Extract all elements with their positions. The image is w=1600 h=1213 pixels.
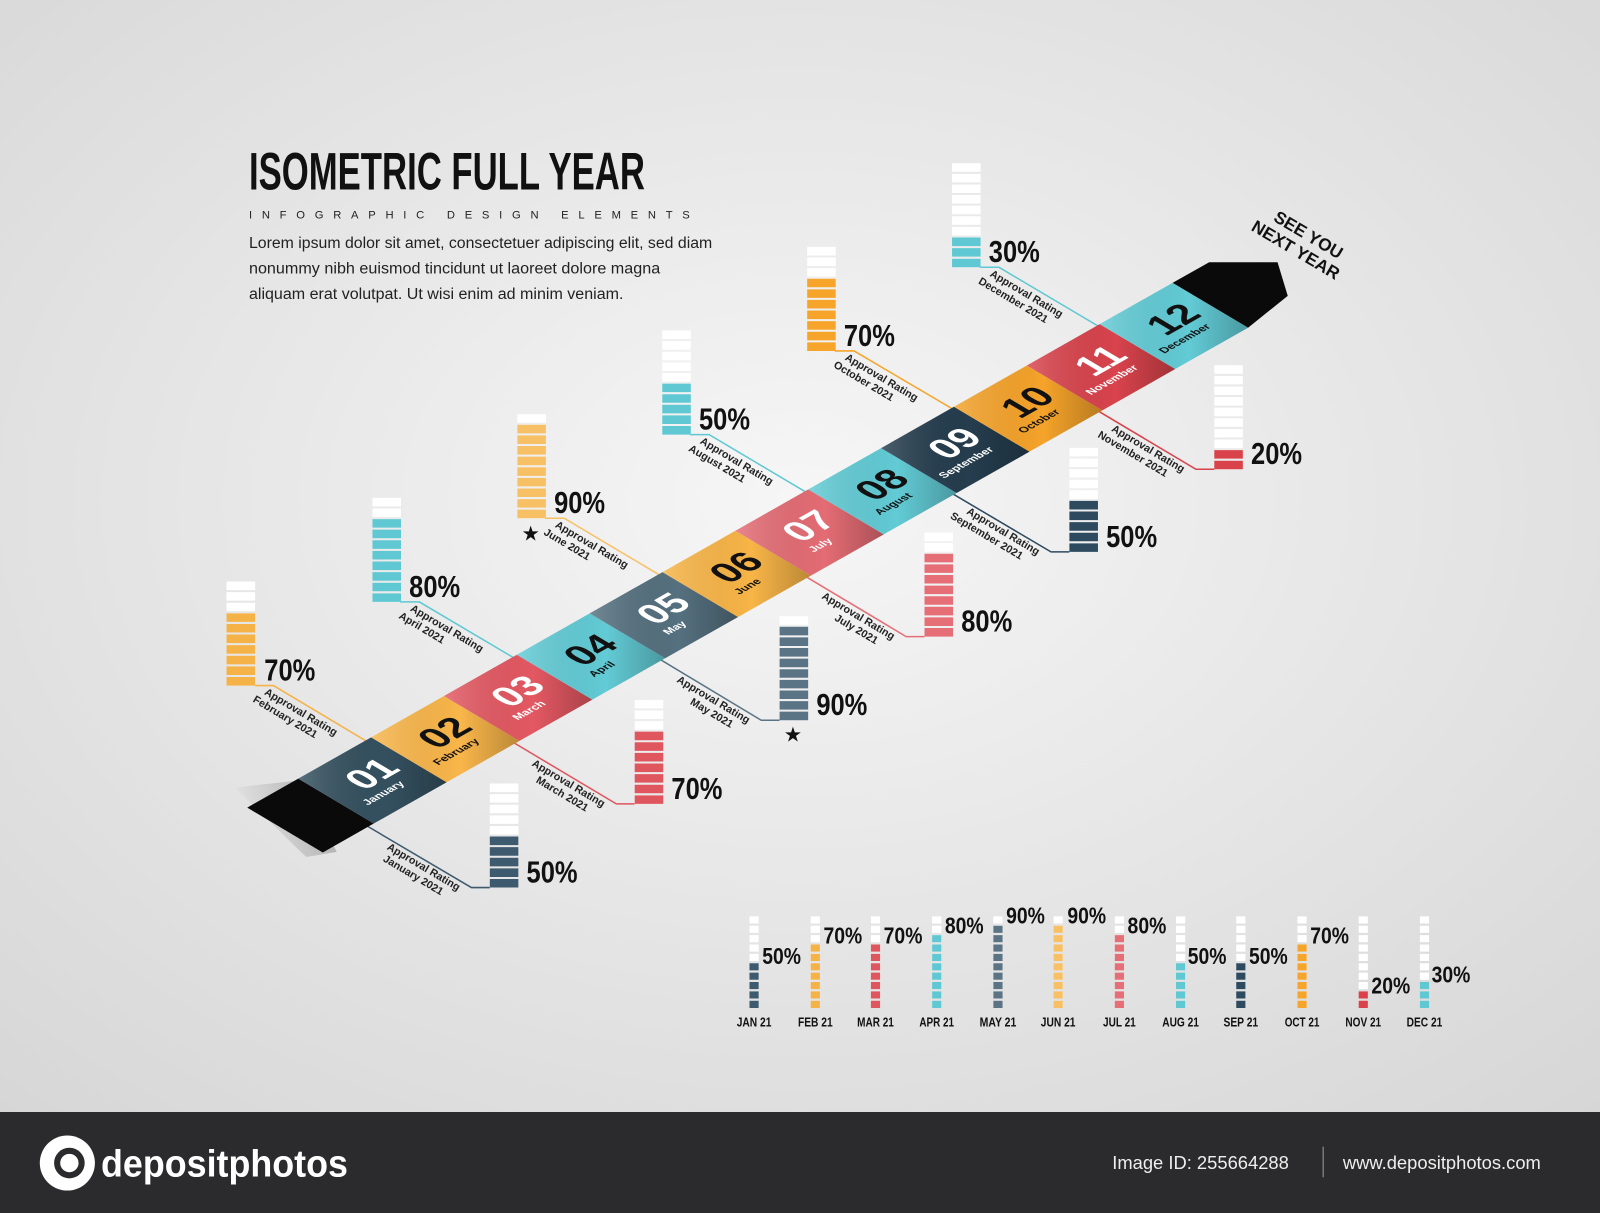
segment 10 <box>954 365 1102 452</box>
approval rating labels: Approval Rating <box>385 841 462 894</box>
summary bar chart: SEP 21 <box>1223 1014 1258 1029</box>
approval rating labels: Approval Rating <box>553 519 630 571</box>
segment 03 <box>444 655 592 741</box>
title: ISOMETRIC FULL YEAR <box>249 143 645 202</box>
footer bar <box>0 1112 1600 1213</box>
approval rating labels: Approval Rating <box>262 686 339 739</box>
summary bar chart: OCT 21 <box>1285 1014 1319 1029</box>
big percentages: 70% <box>671 772 722 806</box>
summary bar chart: NOV 21 <box>1345 1014 1381 1029</box>
segment 10: October <box>1016 408 1064 435</box>
approval rating labels: June 2021 <box>541 526 592 563</box>
approval rating labels: October 2021 <box>831 359 896 404</box>
footer bar: depositphotos <box>101 1142 348 1184</box>
segment 03: 03 <box>481 670 555 713</box>
subtitle: INFOGRAPHIC DESIGN ELEMENTS <box>249 209 690 221</box>
approval rating labels: November 2021 <box>1096 429 1170 480</box>
summary bar chart: 50% <box>762 943 801 969</box>
segment 06: 06 <box>699 546 774 589</box>
description text <box>249 235 712 303</box>
segment 11 <box>1027 324 1175 410</box>
summary bar chart <box>737 902 1471 1029</box>
summary bar chart: APR 21 <box>919 1014 954 1029</box>
summary bar chart: 20% <box>1371 973 1410 999</box>
summary bar chart: JUN 21 <box>1041 1014 1076 1029</box>
segment 12 <box>1100 283 1248 369</box>
summary bar chart: 30% <box>1432 961 1471 987</box>
big percentages: 80% <box>409 570 460 604</box>
segment 07: July <box>806 537 837 554</box>
approval rating labels: February 2021 <box>251 694 319 741</box>
description text: nonummy nibh euismod tincidunt ut laoreet dolore magna <box>249 260 661 277</box>
segment 01: 01 <box>335 753 410 796</box>
big percentages: 90% <box>816 688 867 722</box>
see you next year label: SEE YOU <box>1270 207 1347 263</box>
timeline ribbon <box>298 283 1248 824</box>
summary bar chart: 70% <box>1310 923 1349 949</box>
segment 10: 10 <box>991 381 1065 424</box>
approval rating labels: January 2021 <box>381 853 445 898</box>
segment 05: 05 <box>626 587 701 631</box>
segment 02: 02 <box>408 711 482 754</box>
big bar gauges <box>241 161 1229 888</box>
icon: star may: ★ <box>784 725 802 747</box>
summary bar chart: JUL 21 <box>1103 1014 1136 1029</box>
ribbon shadow <box>235 780 337 857</box>
segment 05: May <box>661 619 691 637</box>
big percentages: 70% <box>844 319 895 353</box>
see you next year label: NEXT YEAR <box>1248 216 1344 284</box>
segment 03: March <box>510 699 549 722</box>
icon: camera logo <box>40 1135 95 1191</box>
big percentages: 90% <box>554 486 605 520</box>
big percentages: 50% <box>527 855 578 889</box>
segment 04 <box>517 613 665 700</box>
approval rating labels: Approval Rating <box>675 674 752 726</box>
segment 09 <box>881 407 1029 493</box>
segment 11: 11 <box>1065 340 1137 382</box>
summary bar chart: 80% <box>1128 912 1166 938</box>
approval rating labels: Approval Rating <box>988 268 1065 321</box>
segment 12: 12 <box>1136 298 1211 341</box>
big percentages: 30% <box>989 235 1040 269</box>
segment 08 <box>808 448 957 534</box>
summary bar chart: DEC 21 <box>1407 1014 1442 1029</box>
icon: star june: ★ <box>521 524 540 546</box>
segment 12: December <box>1157 322 1215 355</box>
summary bar chart: 90% <box>1067 902 1106 928</box>
segment 11: November <box>1083 363 1142 397</box>
approval rating labels: April 2021 <box>397 610 447 646</box>
big percentages: 80% <box>961 604 1012 638</box>
segment 02: February <box>431 737 483 767</box>
approval rating labels: Approval Rating <box>820 590 897 643</box>
approval rating labels: September 2021 <box>948 510 1025 562</box>
summary bar chart: 90% <box>1006 902 1045 928</box>
summary bar chart: AUG 21 <box>1162 1014 1199 1029</box>
ribbon start block <box>247 779 374 852</box>
segment 01 <box>298 737 447 824</box>
summary bar chart: JAN 21 <box>737 1014 771 1029</box>
summary bar chart: 70% <box>823 923 862 949</box>
segment 09: 09 <box>918 422 992 465</box>
summary bar chart: 50% <box>1249 943 1288 969</box>
approval rating labels <box>251 265 1187 904</box>
summary bar chart: MAR 21 <box>857 1014 894 1029</box>
summary bar chart: MAY 21 <box>980 1014 1016 1029</box>
approval rating labels: Approval Rating <box>408 603 485 655</box>
segment 06 <box>663 531 811 617</box>
approval rating labels: Approval Rating <box>1109 423 1187 475</box>
approval rating labels: Approval Rating <box>843 352 920 404</box>
segment 02 <box>371 696 519 782</box>
segment 07 <box>735 489 884 576</box>
approval rating labels: August 2021 <box>686 443 747 486</box>
approval rating labels: December 2021 <box>976 275 1050 326</box>
segment 04: April <box>586 660 619 679</box>
segment 06: June <box>732 577 765 596</box>
summary bar chart: FEB 21 <box>798 1014 833 1029</box>
footer bar: Image ID: 255664288 <box>1112 1152 1289 1173</box>
segment 08: 08 <box>845 463 920 507</box>
segment 09: September <box>936 445 998 480</box>
approval rating labels: Approval Rating <box>698 435 775 488</box>
leader lines <box>255 267 1214 888</box>
segment 08: August <box>872 491 916 517</box>
segment 05 <box>590 572 738 658</box>
big percentages: 70% <box>264 653 315 687</box>
summary bar chart: 50% <box>1188 943 1227 969</box>
approval rating labels: May 2021 <box>688 696 735 731</box>
segment 07: 07 <box>772 505 847 548</box>
summary bar chart: 80% <box>945 912 984 938</box>
big percentages <box>264 235 1302 889</box>
segment 04: 04 <box>554 628 628 672</box>
segment 01: January <box>360 779 408 807</box>
ribbon end arrow <box>1173 262 1288 328</box>
big percentages: 50% <box>699 403 750 436</box>
approval rating labels: Approval Rating <box>530 758 607 810</box>
big percentages: 20% <box>1251 437 1302 471</box>
approval rating labels: July 2021 <box>832 612 880 647</box>
footer bar: www.depositphotos.com <box>1342 1152 1541 1173</box>
big percentages: 50% <box>1106 520 1157 554</box>
approval rating labels: March 2021 <box>534 774 590 814</box>
approval rating labels: Approval Rating <box>964 506 1042 558</box>
description text: aliquam erat volutpat. Ut wisi enim ad minim veniam. <box>249 286 623 303</box>
summary bar chart: 70% <box>884 923 923 949</box>
description text: Lorem ipsum dolor sit amet, consectetuer adipiscing elit, sed diam <box>249 235 712 252</box>
